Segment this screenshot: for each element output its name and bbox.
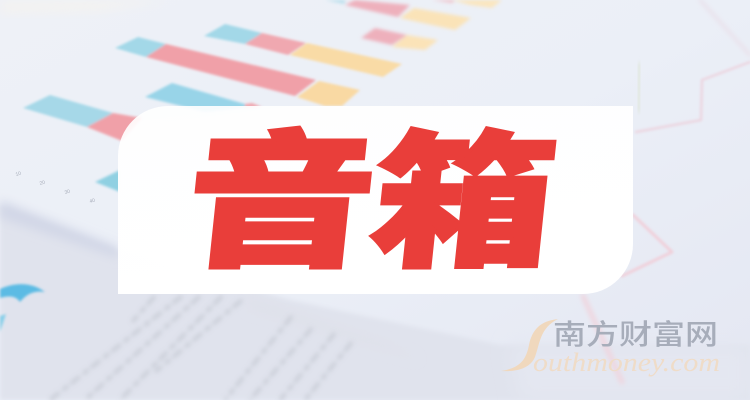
bar: short right — [361, 28, 438, 50]
title: 箱 — [363, 85, 567, 296]
title — [177, 85, 567, 296]
icon: blue swirl — [0, 284, 45, 332]
watermark logo — [501, 313, 720, 377]
line chart: faint lines at right — [583, 0, 750, 382]
title: 音 — [177, 85, 388, 296]
logo latin name: outhmoney.com — [533, 348, 720, 377]
bar chart: blurred stacked bars — [23, 0, 502, 192]
bar: small lower — [95, 170, 120, 192]
chart axis tick labels: 10 — [15, 171, 22, 178]
bar: top middle — [204, 24, 402, 77]
chart axis tick labels: 30 — [64, 189, 71, 196]
icon: S swoosh — [501, 319, 558, 371]
blurred document text lines — [50, 296, 352, 400]
bar: left — [23, 95, 142, 141]
logo Chinese name: 南方财富网 — [553, 313, 718, 353]
chart axis tick labels: 20 — [39, 180, 46, 187]
bar: middle — [145, 83, 262, 112]
bar: upper long — [115, 37, 360, 106]
bar: top right — [300, 0, 502, 30]
chart axis tick labels: 40 — [89, 198, 96, 205]
panel: title card — [118, 106, 633, 294]
chart axis tick labels — [15, 171, 96, 205]
